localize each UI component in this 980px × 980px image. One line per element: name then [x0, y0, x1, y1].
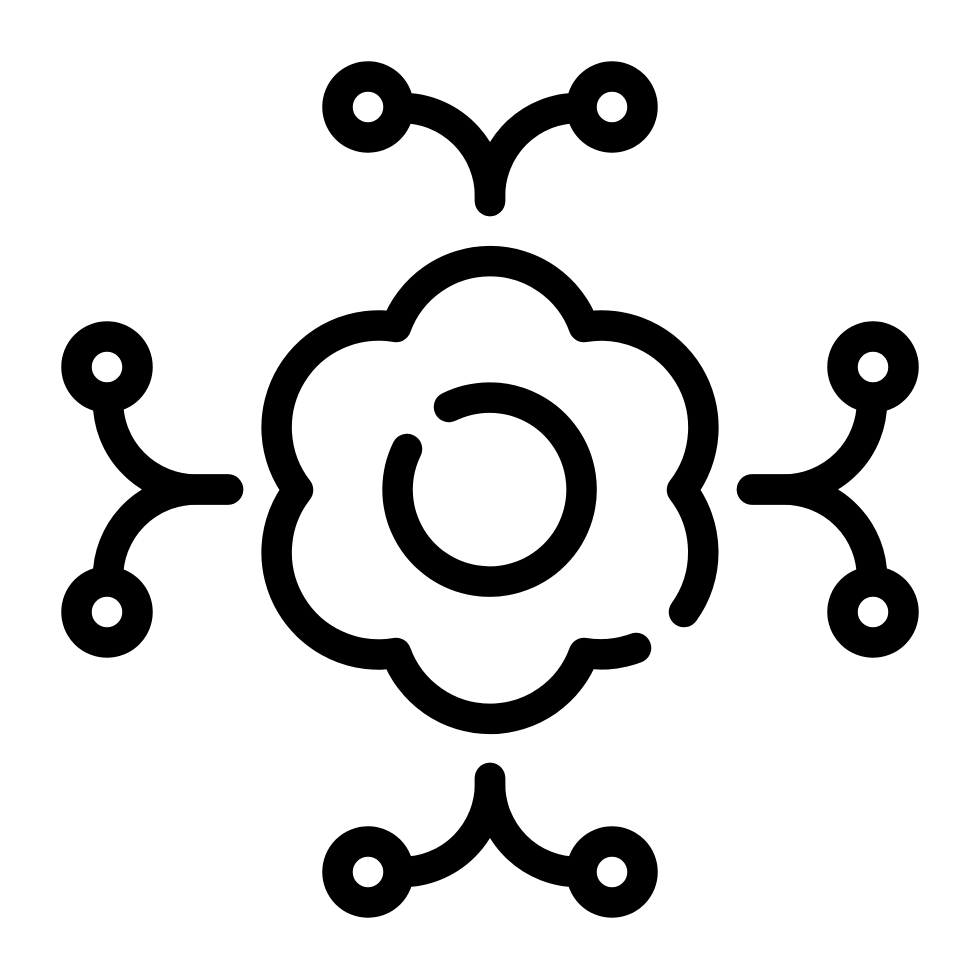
bottom branch	[338, 778, 642, 902]
right branch	[752, 336, 904, 642]
flower outline	[277, 261, 703, 719]
left branch	[76, 336, 228, 642]
center ring	[398, 398, 582, 582]
top branch	[338, 76, 642, 201]
